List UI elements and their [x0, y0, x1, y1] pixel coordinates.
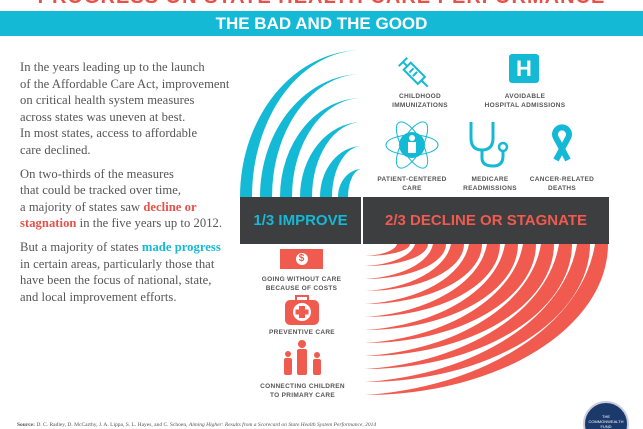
- text block: intro: On two-thirds of the measures: [20, 167, 174, 181]
- text block: intro: have been the focus of national, state,: [20, 273, 211, 287]
- blue arcs: [240, 50, 362, 197]
- icon: syringe: [398, 57, 428, 88]
- label: patient-centered: PATIENT-CENTERED: [377, 176, 447, 183]
- label: childhood: [392, 93, 448, 108]
- label: cancer: CANCER-RELATED: [530, 176, 594, 183]
- label: connecting children: TO PRIMARY CARE: [270, 392, 335, 398]
- icon: money: $: [299, 253, 304, 264]
- label: patient-centered: [377, 176, 447, 192]
- label: connecting children: [260, 383, 345, 398]
- label: cancer: DEATHS: [548, 184, 576, 192]
- dark bar: 1/3 improve: 1/3 IMPROVE: [253, 212, 348, 229]
- logo: commonwealth fund: COMMONWEALTH: [588, 419, 624, 424]
- icon: money: [280, 249, 323, 269]
- label: childhood: IMMUNIZATIONS: [392, 102, 448, 108]
- icon: hospital H: [509, 54, 539, 83]
- text block: intro: [20, 60, 230, 304]
- subtitle band: THE BAD AND THE GOOD: [216, 14, 427, 33]
- dark bar: 1/3 improve: [240, 197, 361, 244]
- logo: commonwealth fund: THE: [602, 414, 610, 419]
- text block: intro: across states was uneven at best.: [20, 110, 185, 124]
- label: going without: [262, 276, 341, 292]
- label: hospital: [485, 93, 565, 108]
- red arcs: [365, 244, 608, 395]
- label: going without: BECAUSE OF COSTS: [266, 284, 337, 292]
- text block: intro: care declined.: [20, 143, 91, 157]
- label: preventive: PREVENTIVE CARE: [269, 329, 335, 336]
- label: hospital: AVOIDABLE: [505, 93, 545, 100]
- dark bar: 2/3 decline: 2/3 DECLINE OR STAGNATE: [385, 212, 587, 229]
- text block: intro: in certain areas, particularly those that: [20, 257, 214, 271]
- dark bar: 2/3 decline: [363, 197, 609, 244]
- label: connecting children: CONNECTING CHILDREN: [260, 383, 345, 390]
- source footnote: Source: D. C. Radley, D. McCarthy, J. A. Lippa, S. L. Hayes, and C. Schoen, Aiming Higher: Results from a Scorecard on State Health System Performance, 2014: [17, 422, 376, 428]
- icon: ribbon: [552, 124, 572, 162]
- text block: intro: In most states, access to affordable: [20, 126, 197, 140]
- label: patient-centered: CARE: [402, 184, 422, 192]
- label: going without: GOING WITHOUT CARE: [262, 276, 341, 283]
- label: medicare: READMISSIONS: [463, 184, 517, 192]
- text block: intro: a majority of states saw decline or: [20, 200, 197, 214]
- label: medicare: [463, 176, 517, 192]
- icon: medkit: [285, 295, 319, 325]
- label: cancer: [530, 176, 594, 192]
- text block: intro: and local improvement efforts.: [20, 290, 177, 304]
- text block: intro: In the years leading up to the launch: [20, 60, 205, 74]
- logo: commonwealth fund: FUND: [600, 424, 612, 429]
- text block: intro: of the Affordable Care Act, improvement: [20, 77, 229, 91]
- logo: commonwealth fund: [583, 401, 629, 429]
- subtitle band: [0, 11, 643, 36]
- text block: intro: on critical health system measures: [20, 93, 194, 107]
- icon: atom person: [386, 121, 438, 169]
- label: medicare: MEDICARE: [471, 176, 509, 183]
- icon: family: [284, 340, 321, 375]
- text block: intro: But a majority of states made progress: [20, 240, 221, 254]
- label: hospital: HOSPITAL ADMISSIONS: [485, 102, 565, 108]
- label: childhood: CHILDHOOD: [399, 93, 441, 100]
- text block: intro: that could be tracked over time,: [20, 183, 181, 197]
- icon: hospital H: H: [516, 56, 532, 81]
- text block: intro: stagnation in the five years up to 2012.: [20, 216, 222, 230]
- icon: stethoscope: [470, 122, 508, 168]
